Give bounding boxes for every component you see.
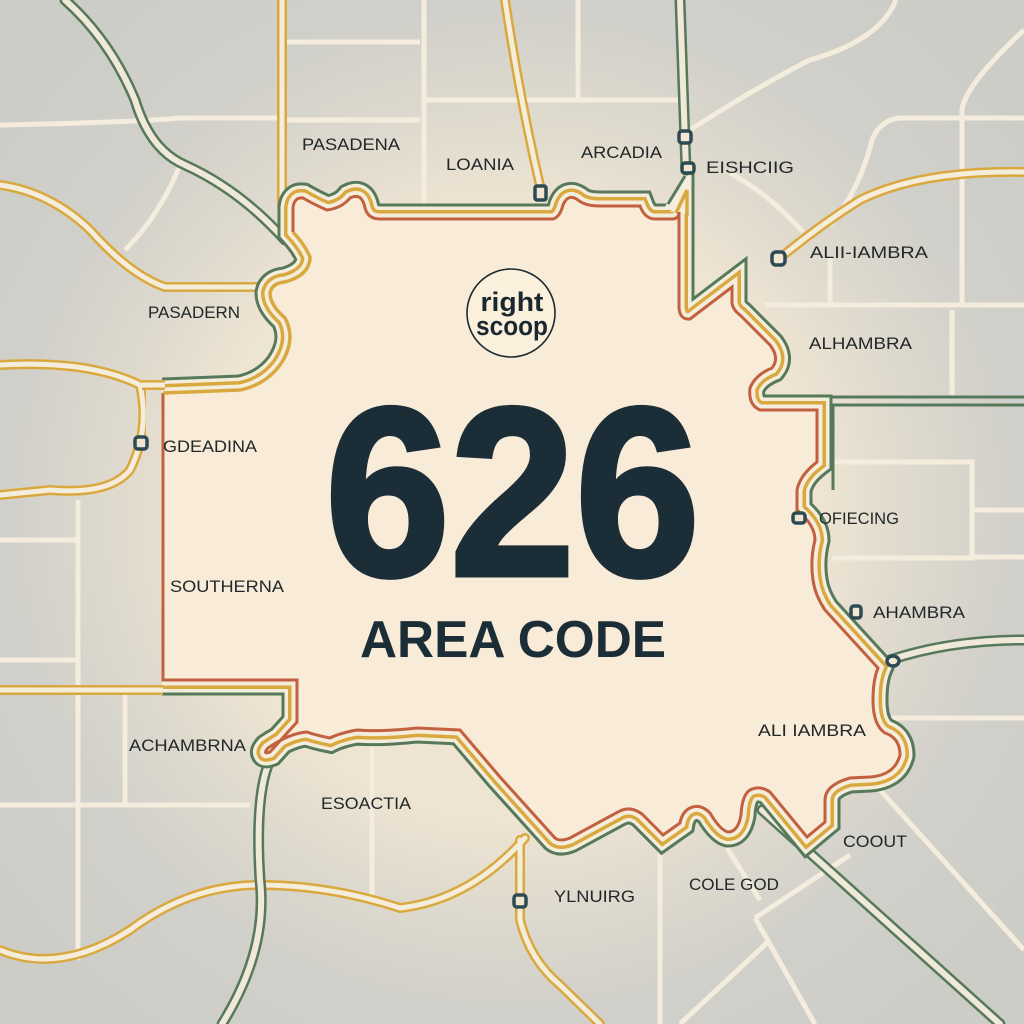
place labels: ALHAMBRA bbox=[809, 335, 912, 353]
place labels: ACHAMBRNA bbox=[129, 737, 246, 755]
red boundary line bbox=[163, 196, 900, 840]
logo bbox=[467, 269, 555, 357]
boundary rings: green, gold bbox=[163, 196, 900, 840]
east green roads bbox=[760, 397, 1024, 490]
place labels: ARCADIA bbox=[581, 144, 662, 162]
place labels: GDEADINA bbox=[163, 438, 257, 456]
west side background patch bbox=[146, 376, 162, 700]
title: 626: 626 bbox=[325, 358, 700, 626]
place labels: ESOACTIA bbox=[321, 795, 411, 813]
northeast junction spike bbox=[664, 172, 694, 216]
place labels: SOUTHERNA bbox=[170, 578, 284, 596]
place labels: AHAMBRA bbox=[873, 604, 965, 622]
place labels: COLE GOD bbox=[689, 876, 779, 894]
logo: right bbox=[480, 287, 544, 317]
place labels: ALII-IAMBRA bbox=[810, 244, 928, 262]
place labels: LOANIA bbox=[446, 156, 514, 174]
logo: scoop bbox=[476, 311, 548, 341]
gold boundary line, northwest bbox=[163, 232, 310, 393]
place labels: ALI IAMBRA bbox=[758, 722, 866, 740]
place labels: PASADENA bbox=[302, 136, 400, 154]
place labels: EISHCIIG bbox=[706, 159, 794, 177]
route markers bbox=[135, 131, 899, 907]
place labels: COOUT bbox=[843, 833, 907, 851]
place labels: YLNUIRG bbox=[554, 888, 635, 906]
626 territory shape bbox=[163, 196, 900, 840]
gold road joins over west patch bbox=[142, 385, 165, 690]
place labels bbox=[129, 136, 965, 906]
place labels: OFIECING bbox=[819, 510, 899, 528]
subtitle: area code: AREA CODE bbox=[360, 611, 666, 669]
place labels: PASADERN bbox=[148, 304, 240, 322]
